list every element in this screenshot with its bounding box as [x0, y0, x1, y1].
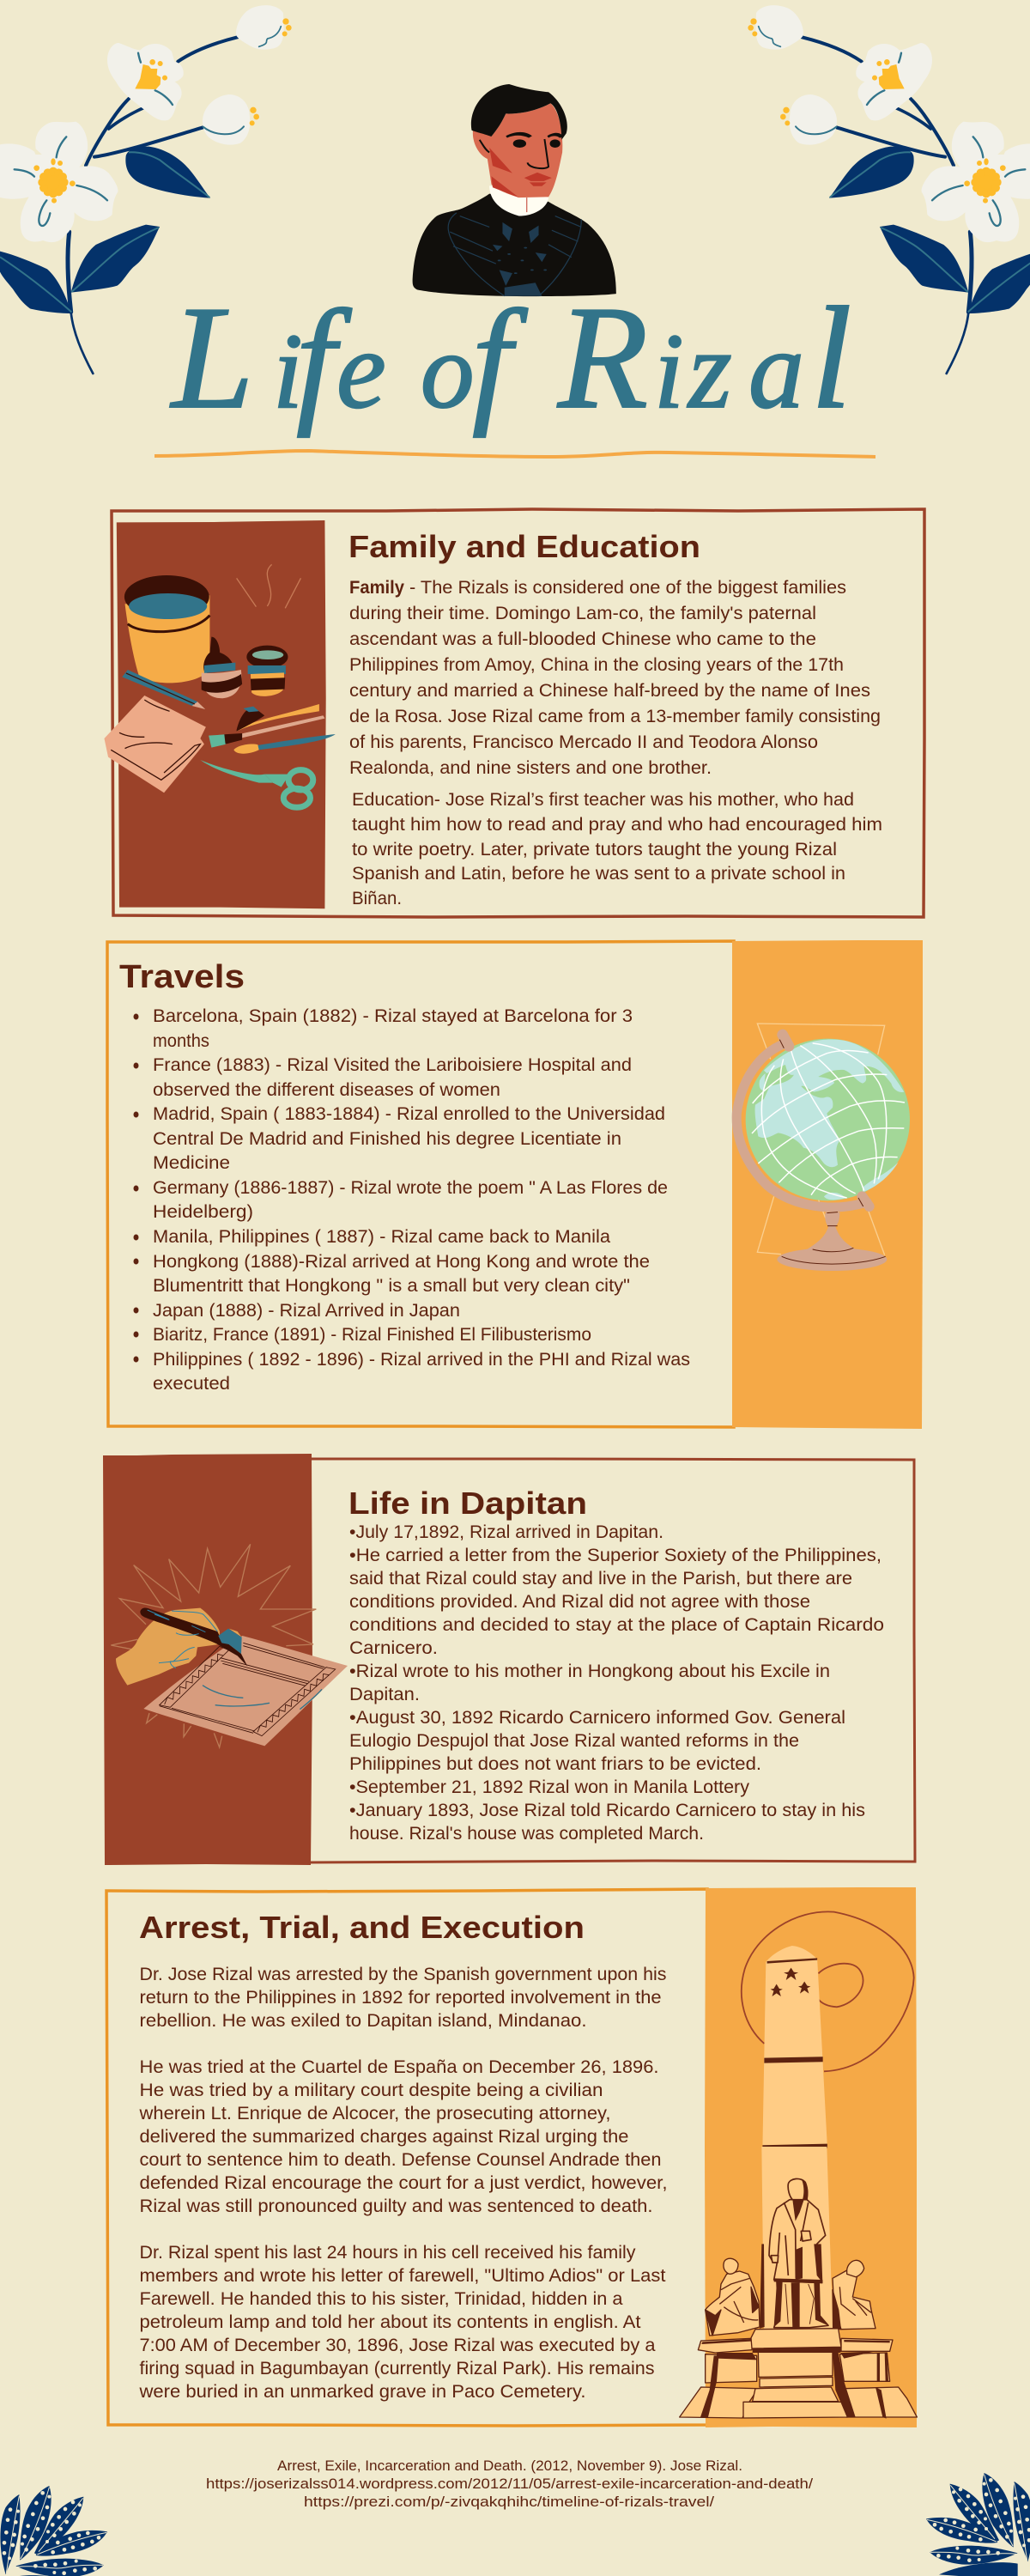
text block: trial: He was tried by a military court despite being a civilian: [139, 2081, 603, 2100]
heading: Life in Dapitan: [348, 1485, 587, 1521]
text block: trial: Rizal was still pronounced guilty and was sentenced to death.: [139, 2196, 652, 2216]
text block: arrest: Dr. Jose Rizal was arrested by the Spanish government upon his: [139, 1965, 666, 1984]
text block: family: de la Rosa. Jose Rizal came from a 13-member family consisting: [349, 707, 881, 726]
text block: education: [352, 790, 882, 908]
portrait of Rizal: [413, 84, 616, 296]
list: travel stops: observed the different diseases of women: [153, 1080, 500, 1100]
list: travel stops: Biaritz, France (1891) - Rizal Finished El Filibusterismo: [153, 1325, 591, 1345]
heading: Family and Education: [348, 529, 700, 564]
text block: trial: He was tried at the Cuartel de España on December 26, 1896.: [139, 2057, 659, 2077]
text block: education: Education- Jose Rizal’s first teacher was his mother, who had: [352, 790, 854, 810]
text block: family: during their time. Domingo Lam-co, the family's paternal: [349, 604, 816, 623]
text block: execution: were buried in an unmarked grave in Paco Cemetery.: [138, 2382, 585, 2402]
text block: Dapitan timeline: house. Rizal's house was completed March.: [349, 1824, 704, 1844]
list: travel stops: Heidelberg): [153, 1202, 253, 1222]
title: i: [654, 313, 684, 431]
seated figure right: [833, 2260, 876, 2330]
title: f: [296, 281, 352, 438]
title: e: [336, 308, 414, 432]
icon: flower branch right: [748, 5, 1030, 374]
list: travel stops: France (1883) - Rizal Visited the Lariboisiere Hospital and: [153, 1055, 632, 1075]
text block: education: taught him how to read and pray and who had encouraged him: [352, 815, 882, 835]
text block: trial: [138, 2057, 668, 2216]
title underline: [154, 451, 876, 457]
list: travel stops: Germany (1886-1887) - Rizal wrote the poem " A Las Flores de: [153, 1178, 668, 1198]
list: travel stops: Blumentritt that Hongkong " is a small but very clean city": [153, 1276, 630, 1296]
list: travel stops: Hongkong (1888)-Rizal arrived at Hong Kong and wrote the: [153, 1252, 650, 1272]
text block: family: of his parents, Francisco Mercado II and Teodora Alonso: [349, 732, 818, 752]
list: travel stops: Central De Madrid and Finished his degree Licentiate in: [153, 1129, 621, 1149]
list: travel stops: months: [153, 1031, 209, 1051]
heading: Arrest, Trial, and Execution: [139, 1910, 585, 1945]
list: travel stops: Manila, Philippines ( 1887) - Rizal came back to Manila: [153, 1227, 610, 1247]
list: travel stops: Medicine: [153, 1153, 230, 1173]
title: R: [557, 276, 648, 440]
footer references: Arrest, Exile, Incarceration and Death. (2012, November 9). Jose Rizal.: [277, 2458, 742, 2474]
panel: travels: [107, 940, 923, 1429]
footer references: https://prezi.com/p/-zivqakqhihc/timeline-of-rizals-travel/: [304, 2494, 714, 2510]
panel image block: [732, 940, 923, 1429]
list: travel stops: [134, 1006, 690, 1394]
panel image block: [104, 520, 336, 908]
seated figure left: [706, 2258, 760, 2336]
icon: flower branch left: [0, 5, 292, 374]
text block: execution: [138, 2243, 666, 2402]
footer references: [206, 2458, 813, 2510]
list: travel stops: Madrid, Spain ( 1883-1884) - Rizal enrolled to the Universidad: [153, 1104, 665, 1124]
title: l: [811, 277, 851, 439]
text block: Dapitan timeline: Philippines but does not want friars to be evicted.: [349, 1754, 761, 1774]
icon: Rizal monument: [680, 1911, 917, 2419]
text block: family: Family: [349, 578, 404, 598]
text block: family: century and married a Chinese half-breed by the name of Ines: [349, 681, 870, 701]
text block: Dapitan timeline: •January 1893, Jose Rizal told Ricardo Carnicero to stay in his: [349, 1801, 865, 1820]
text block: Dapitan timeline: Carnicero.: [349, 1638, 438, 1658]
text block: Dapitan timeline: said that Rizal could stay and live in the Parish, but there are: [349, 1569, 852, 1589]
title: a: [748, 308, 804, 432]
statue of Rizal: [769, 2178, 828, 2328]
text block: education: Spanish and Latin, before he was sent to a private school in: [352, 864, 845, 884]
text block: education: to write poetry. Later, private tutors taught the young Rizal: [352, 840, 837, 860]
footer references: https://joserizalss014.wordpress.com/2012/11/05/arrest-exile-incarceration-and-death/: [206, 2476, 813, 2492]
text block: family: Realonda, and nine sisters and one brother.: [349, 758, 712, 778]
text block: family: - The Rizals is considered one of the biggest families: [409, 578, 846, 598]
text block: arrest: rebellion. He was exiled to Dapitan island, Mindanao.: [139, 2011, 587, 2031]
panel image block: [103, 1454, 312, 1865]
text block: Dapitan timeline: [349, 1522, 884, 1844]
text block: Dapitan timeline: •August 30, 1892 Ricardo Carnicero informed Gov. General: [349, 1708, 845, 1728]
text block: execution: petroleum lamp and told her about its contents in english. At: [139, 2312, 641, 2332]
text block: trial: court to sentence him to death. Defense Counsel Andrade then: [139, 2150, 661, 2170]
text block: trial: defended Rizal encourage the court for a just verdict, however,: [139, 2173, 668, 2193]
text block: Dapitan timeline: •Rizal wrote to his mother in Hongkong about his Excile in: [349, 1662, 830, 1681]
list: travel stops: Philippines ( 1892 - 1896) - Rizal arrived in the PHI and Rizal was: [153, 1350, 690, 1370]
title: L: [169, 276, 254, 440]
text block: Dapitan timeline: •September 21, 1892 Rizal won in Manila Lottery: [349, 1777, 750, 1797]
text block: execution: members and wrote his letter of farewell, "Ultimo Adios" or Last: [139, 2266, 666, 2286]
icon: leaves bottom left: [0, 2486, 107, 2576]
panel: arrest, trial, and execution: [106, 1887, 917, 2427]
text block: family: [349, 578, 881, 778]
panel: life in Dapitan: [103, 1454, 915, 1865]
icon: leaves bottom right: [926, 2473, 1030, 2576]
list: travel stops: Barcelona, Spain (1882) - Rizal stayed at Barcelona for 3: [153, 1006, 633, 1026]
panel: family and education: [104, 509, 924, 917]
text block: execution: Dr. Rizal spent his last 24 hours in his cell received his family: [139, 2243, 636, 2263]
icon: globe: [736, 1024, 910, 1271]
text block: execution: Farewell. He handed this to his sister, Trinidad, hidden in a: [139, 2289, 623, 2309]
title: f: [472, 281, 547, 438]
title: i: [273, 313, 303, 431]
monument base: [680, 2329, 917, 2418]
text block: Dapitan timeline: conditions provided. And Rizal did not agree with those: [349, 1592, 810, 1612]
text block: trial: delivered the summarized charges against Rizal urging the: [139, 2127, 628, 2147]
text block: Dapitan timeline: •July 17,1892, Rizal arrived in Dapitan.: [349, 1522, 663, 1542]
text block: Dapitan timeline: Eulogio Despujol that Jose Rizal wanted reforms in the: [349, 1731, 799, 1751]
list: travel stops: Japan (1888) - Rizal Arrived in Japan: [153, 1301, 460, 1321]
title: z: [687, 308, 732, 432]
text block: arrest: [139, 1965, 666, 2031]
text block: family: ascendant was a full-blooded Chinese who came to the: [349, 629, 816, 649]
text block: arrest: return to the Philippines in 1892 for reported involvement in the: [139, 1988, 661, 2008]
text block: Dapitan timeline: Dapitan.: [349, 1685, 420, 1704]
icon: hand drawing on a page: [111, 1544, 348, 1747]
panel image block: [705, 1887, 917, 2427]
text block: trial: wherein Lt. Enrique de Alcocer, the prosecuting attorney,: [138, 2104, 611, 2123]
text block: family: Philippines from Amoy, China in the closing years of the 17th: [349, 655, 844, 675]
icon: art supplies: [104, 564, 336, 807]
heading: Travels: [119, 959, 245, 995]
text block: Dapitan timeline: •He carried a letter from the Superior Soxiety of the Philippines,: [349, 1546, 882, 1565]
text block: Dapitan timeline: conditions and decided to stay at the place of Captain Ricardo: [349, 1615, 884, 1635]
text block: execution: firing squad in Bagumbayan (currently Rizal Park). His remains: [139, 2359, 654, 2379]
title: o: [421, 313, 474, 431]
text block: education: Biñan.: [352, 889, 402, 908]
text block: execution: 7:00 AM of December 30, 1896, Jose Rizal was executed by a: [139, 2336, 656, 2355]
list: travel stops: executed: [153, 1374, 230, 1394]
